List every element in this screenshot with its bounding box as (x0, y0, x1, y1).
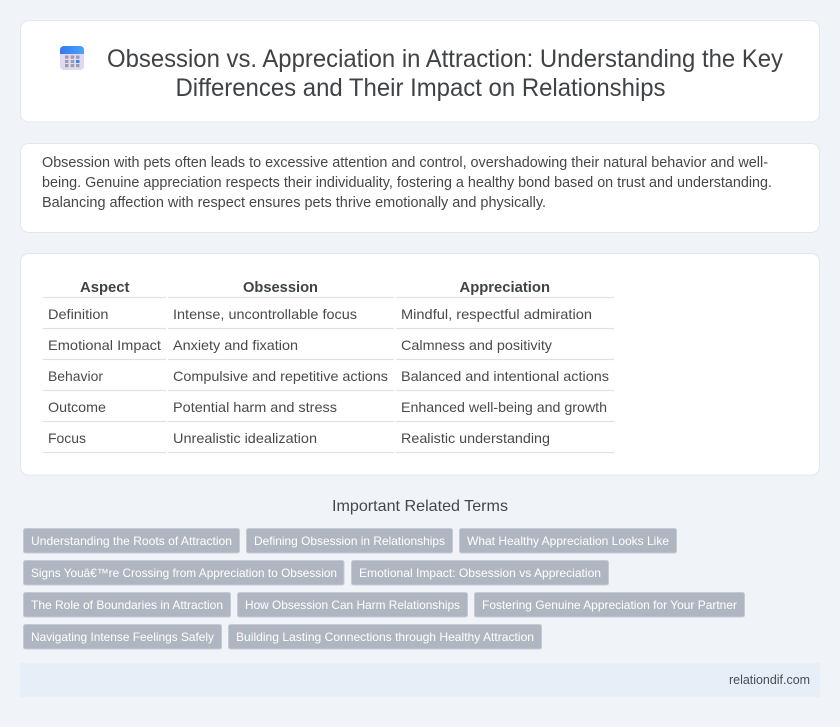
tag: Defining Obsession in Relationships (254, 534, 445, 548)
tag: What Healthy Appreciation Looks Like (467, 534, 669, 548)
table header (80, 280, 550, 296)
tag: Understanding the Roots of Attraction (31, 534, 232, 548)
tag (246, 528, 452, 553)
row: definition: Mindful, respectful admiration (401, 306, 592, 322)
row: behavior: Balanced and intentional actions (401, 368, 609, 384)
row: outcome: Enhanced well-being and growth (401, 399, 607, 415)
table header: Appreciation (460, 280, 550, 296)
footer: relationdif.com (729, 673, 810, 687)
tag (238, 592, 468, 617)
row: behavior (48, 368, 609, 384)
tag (352, 560, 608, 585)
tag: Signs Youâ€™re Crossing from Appreciation to Obsession (31, 566, 337, 580)
tag: Building Lasting Connections through Healthy Attraction (236, 630, 534, 644)
row: outcome: Potential harm and stress (173, 399, 337, 415)
tag (474, 592, 744, 617)
row: emotional impact (48, 337, 552, 353)
row: focus: Unrealistic idealization (173, 430, 317, 446)
tag: Fostering Genuine Appreciation for Your Partner (482, 598, 737, 612)
title (107, 45, 783, 102)
row: focus: Realistic understanding (401, 430, 550, 446)
panel: introduction (20, 144, 820, 232)
row: outcome (48, 399, 607, 415)
title: Differences and Their Impact on Relationships (176, 74, 666, 102)
row: definition: Definition (48, 306, 108, 322)
intro text: Balancing affection with respect ensures pets thrive emotionally and physically. (42, 195, 546, 211)
table header: Obsession (243, 280, 318, 296)
related term tags (24, 528, 744, 649)
row: definition (48, 306, 592, 322)
table header: Aspect (80, 280, 130, 296)
panel: header (20, 20, 820, 122)
tag (24, 528, 240, 553)
title: Obsession vs. Appreciation in Attraction: Understanding the Key (107, 45, 783, 73)
panel: comparison table (20, 254, 820, 475)
tag: Emotional Impact: Obsession vs Appreciation (359, 566, 601, 580)
intro text: Obsession with pets often leads to excessive attention and control, overshadowing their natural behavior and well- (42, 155, 768, 171)
tag: Navigating Intense Feelings Safely (31, 630, 214, 644)
row: behavior: Behavior (48, 368, 103, 384)
row: emotional impact: Anxiety and fixation (173, 337, 298, 353)
tag: How Obsession Can Harm Relationships (245, 598, 460, 612)
row: behavior: Compulsive and repetitive actions (173, 368, 388, 384)
icon: calendar (60, 46, 84, 70)
intro text: being. Genuine appreciation respects their individuality, fostering a healthy bond based on trust and understanding. (42, 175, 772, 191)
heading: important related terms: Important Related Terms (332, 498, 508, 515)
row: outcome: Outcome (48, 399, 106, 415)
tag (228, 624, 542, 649)
tag (24, 560, 344, 585)
row: focus (48, 430, 550, 446)
row: definition: Intense, uncontrollable focus (173, 306, 357, 322)
row: emotional impact: Calmness and positivity (401, 337, 552, 353)
tag (460, 528, 676, 553)
tag (24, 592, 230, 617)
intro text (42, 155, 772, 211)
row: emotional impact: Emotional Impact (48, 337, 161, 353)
footer (20, 663, 820, 697)
tag: The Role of Boundaries in Attraction (31, 598, 223, 612)
row: focus: Focus (48, 430, 86, 446)
tag (24, 624, 222, 649)
